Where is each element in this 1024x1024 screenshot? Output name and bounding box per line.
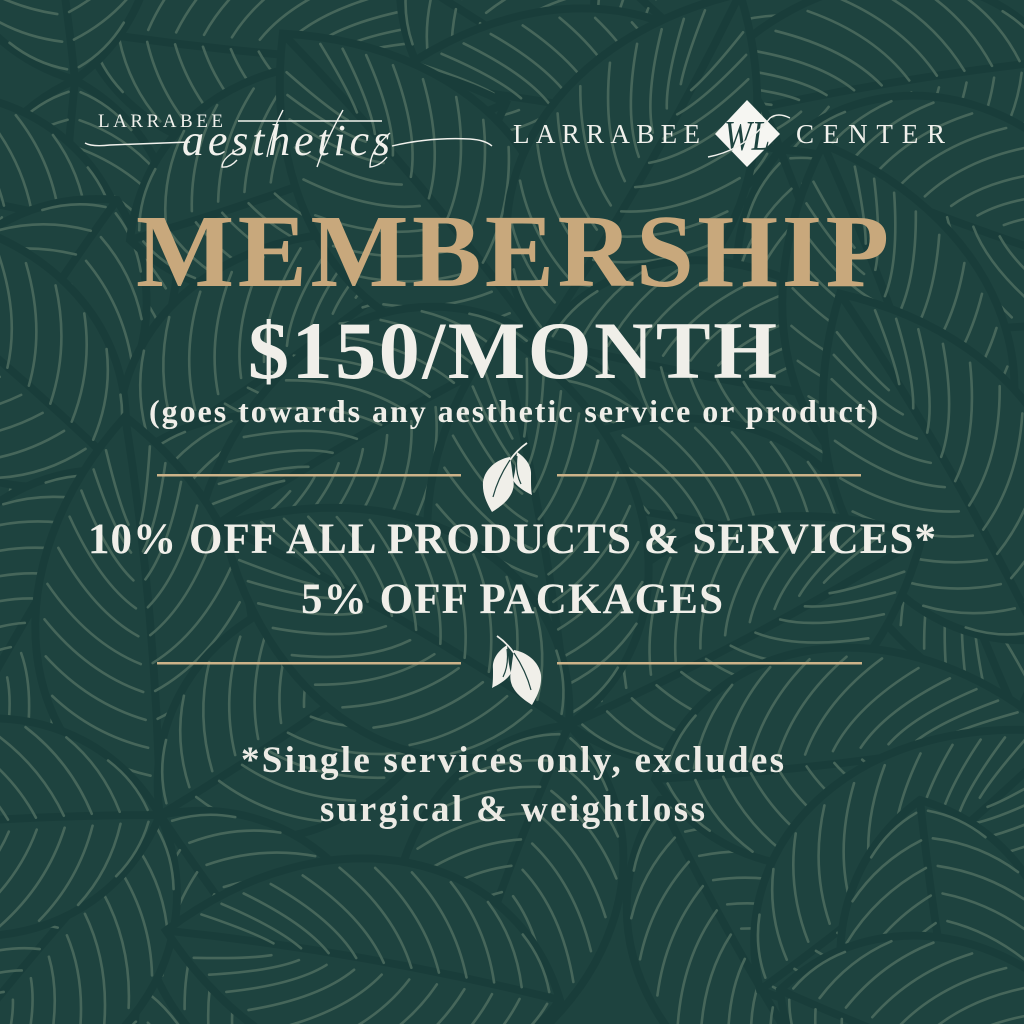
title: MEMBERSHIP [136,194,889,309]
script swash strokes [85,110,492,167]
wordmark: CENTER: CENTER [796,119,945,149]
divider with leaf icon [157,443,861,512]
discount line 2: 5% OFF PACKAGES [301,576,723,623]
icon: WL diamond monogram [708,100,790,167]
footnote [241,740,784,830]
footnote: surgical & weightloss [320,789,705,830]
wordmark: LARRABEE: LARRABEE [98,111,223,132]
logo: Larrabee Aesthetics [85,110,492,167]
wordmark script: aesthetics: aesthetics [182,116,390,165]
footnote: *Single services only, excludes [241,740,784,781]
logo: Larrabee Center [513,100,945,167]
price: $150/MONTH [248,305,777,396]
icon: leaves [492,636,541,705]
icon: WL diamond monogram: WL [724,114,770,160]
price note: (goes towards any aesthetic service or product) [149,393,878,429]
discount line 1: 10% OFF ALL PRODUCTS & SERVICES* [88,516,936,563]
icon: leaves [483,443,532,512]
divider with leaf icon [157,636,862,705]
wordmark: LARRABEE: LARRABEE [513,119,700,149]
